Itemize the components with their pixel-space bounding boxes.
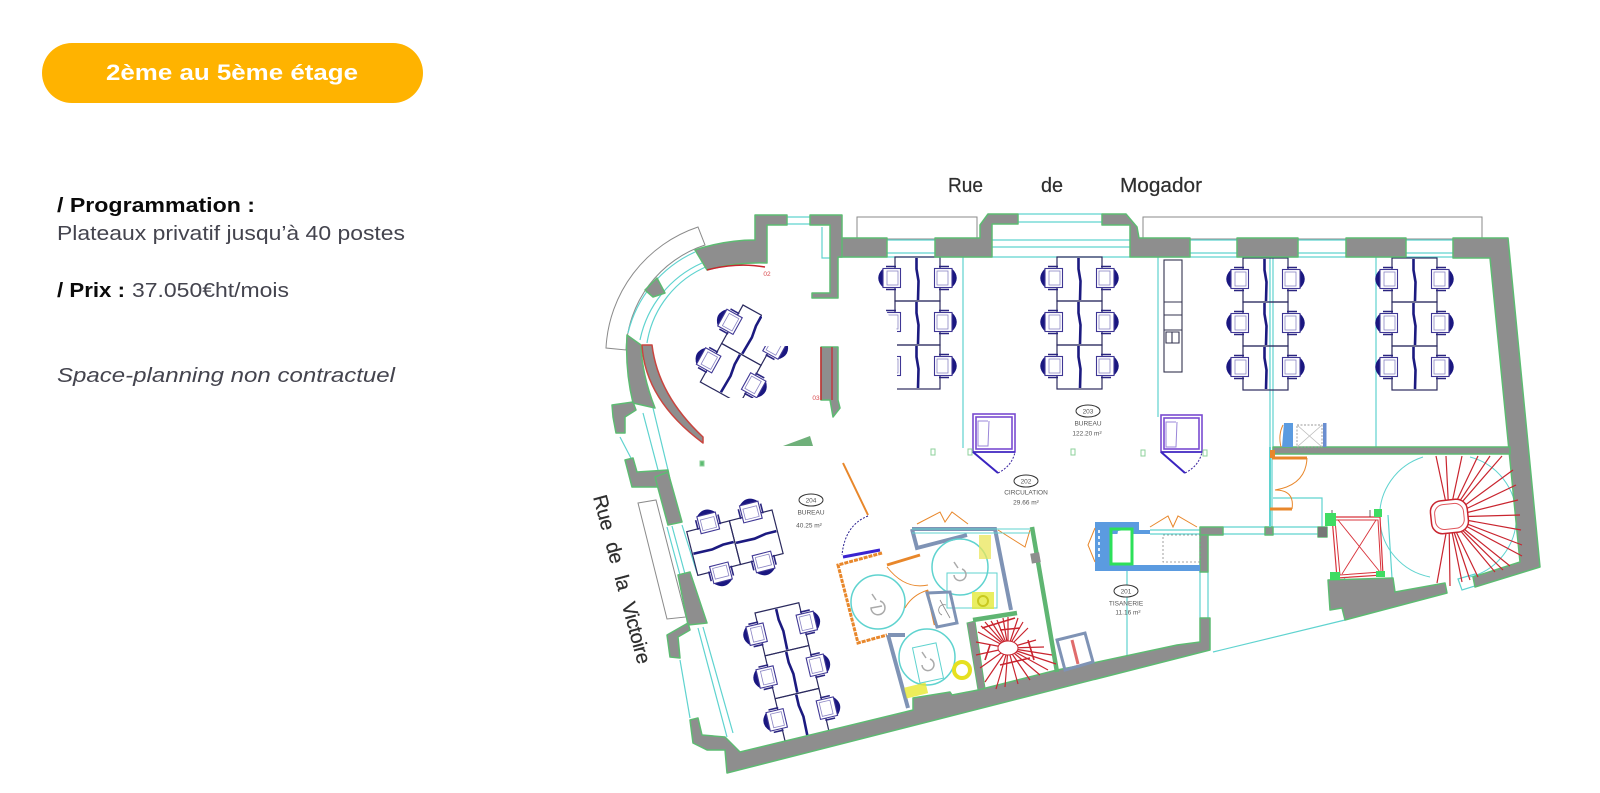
redacted area over turret desks	[703, 298, 833, 458]
service shaft	[927, 592, 957, 627]
workstations: turret	[686, 297, 797, 412]
tisanerie equipment	[1088, 516, 1200, 571]
room label 203 bureau	[1072, 405, 1102, 438]
small stair	[976, 617, 1056, 689]
room label 201 tisanerie: 201	[1121, 588, 1132, 596]
workstations: top row	[878, 257, 1454, 390]
room label 202 circulation: CIRCULATION	[1004, 490, 1048, 496]
redacted area over workstation	[840, 300, 897, 395]
disclaimer: Space-planning non contractuel	[57, 365, 396, 387]
WC room 1	[838, 553, 905, 643]
room label 201 tisanerie: TISANERIE	[1109, 600, 1144, 608]
price value: 37.050€ht/mois	[132, 280, 289, 302]
lobby doors	[1270, 450, 1307, 509]
room label 202 circulation: 29.66 m²	[1013, 500, 1040, 506]
room label 204 bureau	[796, 494, 825, 530]
red markers in turret: 02	[763, 271, 771, 278]
purple closet left	[973, 414, 1015, 473]
room label 204 bureau: 40.25 m²	[796, 522, 823, 530]
WC room 3	[888, 629, 970, 708]
balconies	[606, 217, 1482, 619]
partitions and window lines	[620, 214, 1516, 737]
workstations: bureau 204 lower	[739, 599, 845, 745]
storage unit	[1164, 260, 1182, 372]
red markers in turret: 03	[812, 395, 820, 402]
small shaft near stair	[1057, 633, 1093, 670]
room label 203 bureau: 122.20 m²	[1072, 430, 1102, 438]
programmation heading: / Programmation :	[57, 195, 255, 217]
green markers	[700, 449, 1207, 466]
room label 201 tisanerie	[1109, 585, 1144, 616]
room label 203 bureau: BUREAU	[1074, 420, 1102, 428]
technical shaft	[1280, 423, 1326, 447]
red partition lines in turret	[707, 265, 832, 400]
room label 202 circulation: 202	[1021, 478, 1032, 486]
street label: Rue de Mogador: Mogador	[1120, 175, 1202, 197]
room label 202 circulation	[1004, 475, 1048, 506]
room label 204 bureau: BUREAU	[797, 510, 825, 516]
floor level badge: 2ème au 5ème étage	[106, 60, 358, 85]
room label 204 bureau: 204	[806, 498, 817, 504]
red markers in turret	[763, 271, 820, 402]
walls	[612, 214, 1540, 773]
room label 203 bureau: 203	[1083, 408, 1094, 416]
street label: Rue de Mogador: de	[1041, 175, 1063, 197]
floor level badge	[42, 43, 423, 103]
purple closet right	[1161, 415, 1202, 473]
spiral staircase	[1429, 456, 1522, 586]
programme details text block	[57, 195, 405, 387]
elevator	[1318, 509, 1385, 580]
programmation value: Plateaux privatif jusqu’à 40 postes	[57, 223, 405, 245]
street label: Rue de la Victoire: Rue de la Victoire	[588, 493, 654, 666]
room label 201 tisanerie: 11.16 m²	[1115, 610, 1141, 616]
workstations: bureau 204 upper	[683, 494, 787, 592]
street label: Rue de Mogador	[948, 175, 1202, 197]
green wall around stair	[912, 527, 1057, 690]
price label: / Prix :	[57, 280, 125, 302]
floor plan	[588, 175, 1540, 773]
door: bureau 204	[842, 463, 880, 557]
WC room 2	[887, 512, 1030, 625]
street label: Rue de Mogador: Rue	[948, 175, 983, 197]
